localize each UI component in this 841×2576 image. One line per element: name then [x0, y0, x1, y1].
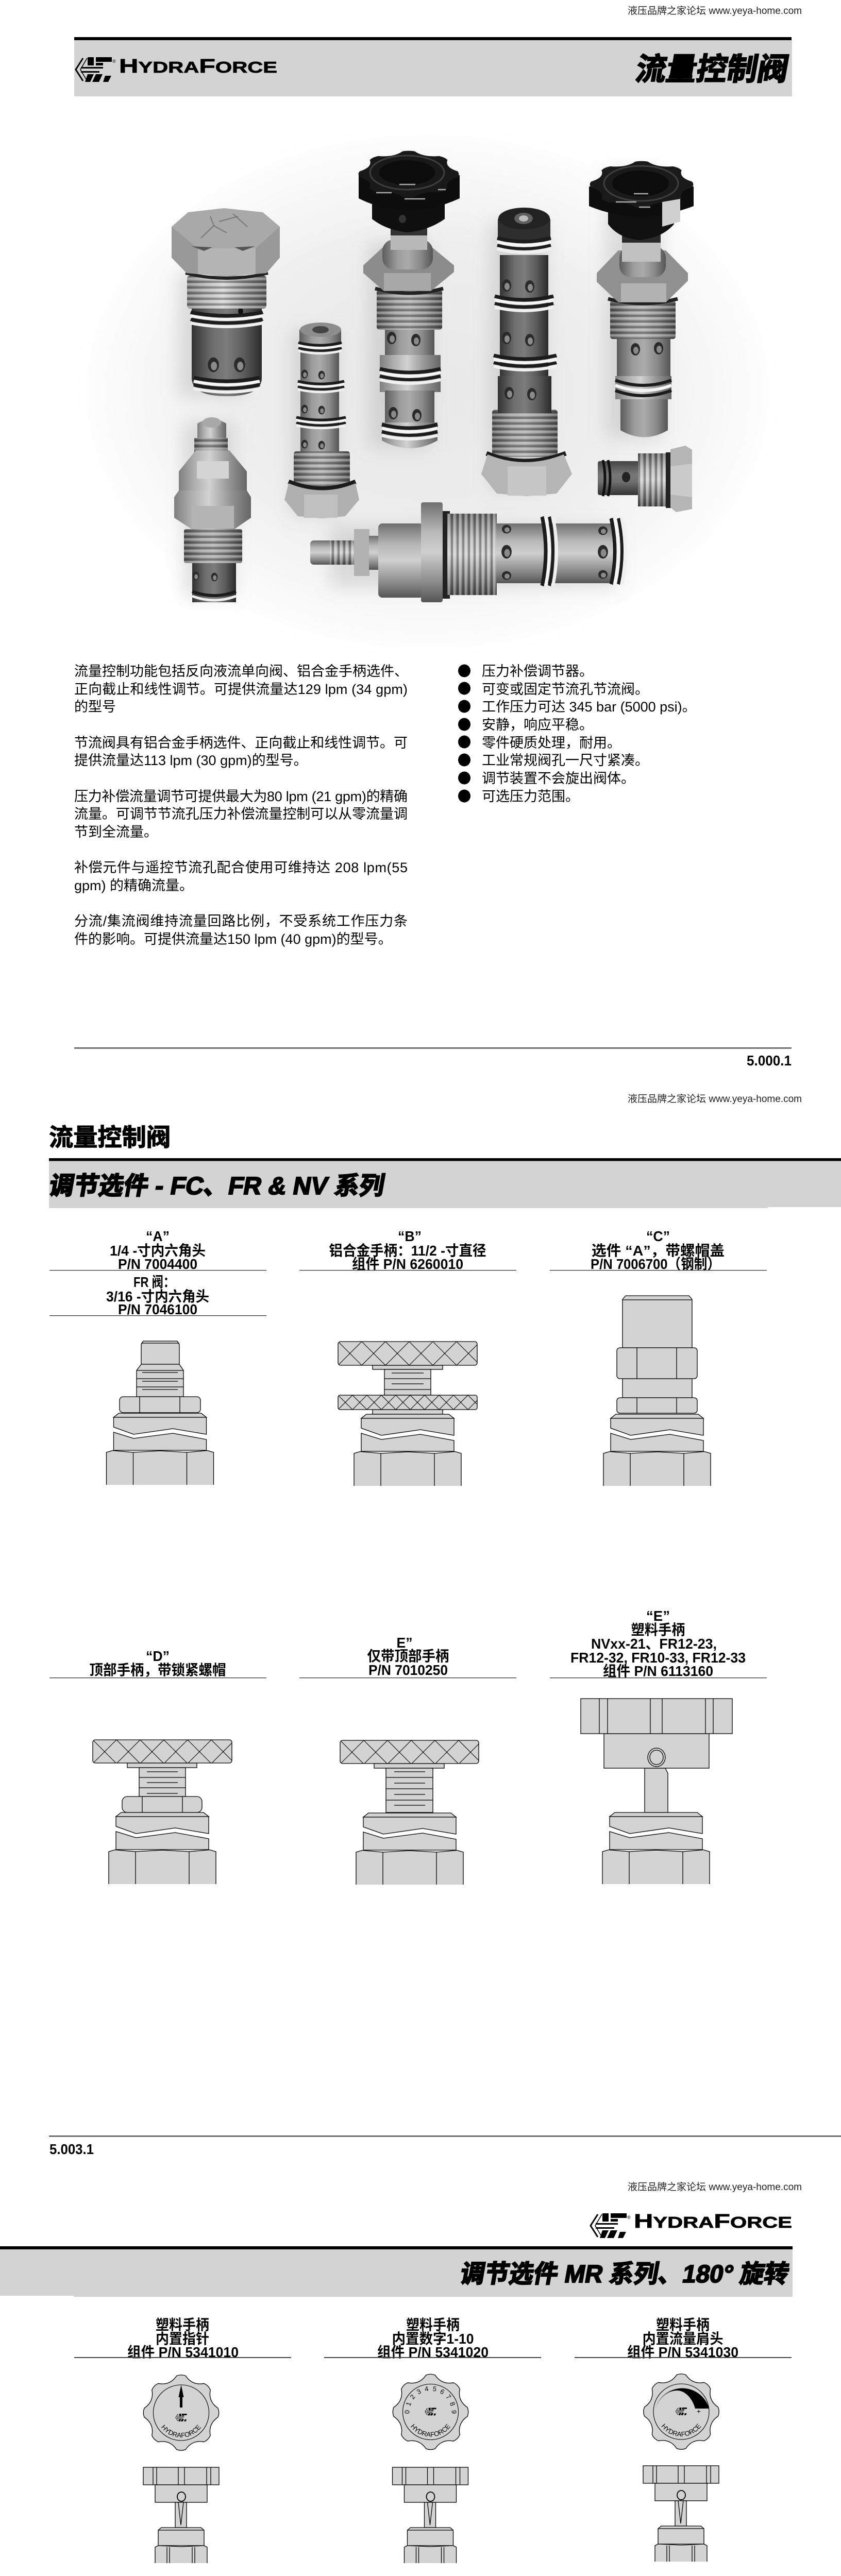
option 5341010: plastic handle with pointer: 塑料手柄 — [156, 2317, 209, 2333]
footer: page 2: 5.003.1 — [49, 2141, 94, 2157]
bullet list: features: 可变或固定节流孔节流阀。 — [482, 682, 649, 697]
option 5341010: plastic handle with pointer: 内置指针 — [156, 2331, 209, 2347]
watermark: page 2: 液压品牌之家论坛 www.yeya-home.com — [628, 1093, 802, 1105]
heading: adjustment options: 调节选件 - FC、FR & NV 系列 — [47, 1172, 387, 1200]
drawing: top view numbered knob: 0 — [403, 2410, 411, 2414]
valve: small horizontal — [598, 446, 692, 512]
logo: HydraForce page 3 — [591, 2211, 792, 2238]
option C: label and drawing — [550, 1228, 767, 1486]
drawing: top view pointer knob: HYDRAFORCE — [161, 2425, 201, 2438]
option A: label and drawing — [49, 1228, 266, 1485]
option D: label and drawing: “D” — [146, 1648, 170, 1664]
option 5341010: plastic handle with pointer: 组件 P/N 5341010 — [127, 2344, 239, 2360]
heading: MR adjustment options: 调节选件 MR 系列、180° 旋转 — [458, 2260, 792, 2288]
bullet list: features: 可选压力范围。 — [482, 789, 579, 804]
option A: label and drawing: 3/16 -寸内六角头 — [106, 1289, 209, 1304]
text block: product description: 件的影响。可提供流量达150 lpm (40 gpm)的型号。 — [74, 931, 392, 947]
option E plastic: label and drawing — [550, 1608, 767, 1884]
drawing: side view — [393, 2467, 468, 2563]
text block: product description: 补偿元件与遥控节流孔配合使用可维持达 208 lpm(55 — [74, 860, 408, 875]
option 5341030: plastic handle with flow wedge: 组件 P/N 5341030 — [627, 2344, 738, 2360]
bullet list: features — [458, 664, 696, 804]
option E: label and drawing: P/N 7010250 — [368, 1662, 448, 1678]
option 5341020: plastic handle with numbers: 组件 P/N 5341020 — [377, 2344, 489, 2360]
text block: product description: 分流/集流阀维持流量回路比例，不受系统工作压力条 — [74, 913, 408, 929]
option D: label and drawing: 顶部手柄，带锁紧螺帽 — [90, 1662, 226, 1678]
drawing: top view numbered knob: 5 — [432, 2385, 437, 2393]
option 5341030: plastic handle with flow wedge — [575, 2317, 792, 2562]
option 5341020: plastic handle with numbers: 塑料手柄 — [406, 2317, 460, 2333]
logo: HydraForce — [76, 56, 277, 82]
drawing: top view numbered knob: HYDRAFORCE — [411, 2424, 450, 2437]
drawing: top view numbered knob: 1 — [404, 2401, 413, 2407]
text block: product description: 正向截止和线性调节。可提供流量达129 lpm (34 gpm) — [74, 682, 408, 697]
option 5341020: plastic handle with numbers: 内置数字1-10 — [392, 2331, 474, 2347]
option C: label and drawing: P/N 7006700（钢制） — [591, 1256, 720, 1272]
drawing: top handle with locknut — [93, 1740, 232, 1884]
option A: label and drawing: “A” — [146, 1228, 170, 1244]
option 5341030: plastic handle with flow wedge: 塑料手柄 — [656, 2317, 710, 2333]
text block: product description: 的型号 — [74, 699, 116, 715]
watermark: page 3: 液压品牌之家论坛 www.yeya-home.com — [628, 2181, 802, 2193]
drawing: aluminium handle — [338, 1342, 477, 1486]
option C: label and drawing: “C” — [646, 1228, 670, 1244]
option E: label and drawing: 仅带顶部手柄 — [367, 1648, 449, 1664]
valve: small cartridge — [284, 323, 359, 518]
drawing: top view wedge knob — [643, 2374, 719, 2450]
option B: label and drawing: “B” — [398, 1228, 422, 1244]
text block: product description: gpm) 的精确流量。 — [74, 878, 193, 893]
option C: label and drawing: 选件 “A”，带螺帽盖 — [592, 1243, 725, 1259]
option A: label and drawing: 1/4 -寸内六角头 — [110, 1243, 206, 1259]
text block: product description: 节流阀具有铝合金手柄选件、正向截止和线性调节。可 — [74, 735, 408, 751]
logo: HydraForce page 3: ® — [627, 2215, 631, 2220]
valve: lower left adjuster — [174, 417, 251, 602]
valve: knob adjuster right — [589, 161, 694, 437]
text block: product description — [74, 664, 408, 947]
soft shadows — [178, 170, 662, 598]
drawing: top view numbered knob — [393, 2374, 469, 2450]
option B: label and drawing: 组件 P/N 6260010 — [352, 1256, 463, 1272]
footer: page 1: 5.000.1 — [747, 1053, 792, 1069]
drawing: top view numbered knob: 9 — [450, 2410, 458, 2414]
logo: HydraForce: ® — [112, 59, 116, 64]
drawing: top view numbered knob: 6 — [439, 2387, 446, 2396]
option E: label and drawing: E” — [397, 1635, 412, 1651]
drawing: top handle only — [340, 1740, 479, 1885]
valve: hex plug — [172, 208, 280, 396]
option E plastic: label and drawing: “E” — [646, 1608, 670, 1624]
product photo: flow control valves — [72, 124, 783, 659]
option B: label and drawing: 铝合金手柄：11/2 -寸直径 — [329, 1243, 486, 1259]
option E plastic: label and drawing: FR12-32, FR10-33, FR12-33 — [570, 1650, 746, 1666]
heading: page title: 流量控制阀 — [633, 52, 792, 87]
option 5341030: plastic handle with flow wedge: 内置流量肩头 — [642, 2331, 724, 2347]
drawing: hex socket adjuster — [106, 1341, 213, 1485]
option D: label and drawing — [49, 1648, 266, 1884]
drawing: top view numbered knob: 7 — [444, 2393, 452, 2401]
heading: section title page 2: 流量控制阀 — [49, 1124, 171, 1151]
logo: HydraForce: H YDRA F ORCE — [119, 56, 277, 77]
drawing: top view wedge knob: HYDRAFORCE — [662, 2424, 701, 2437]
drawing: top view numbered knob: 4 — [424, 2385, 429, 2393]
bullet list: features: 压力补偿调节器。 — [482, 664, 593, 679]
text block: product description: 流量控制功能包括反向液流单向阀、铝合金手柄选件、 — [74, 664, 408, 679]
logo: HydraForce page 3: H YDRA F ORCE — [634, 2211, 792, 2232]
text block: product description: 节到全流量。 — [74, 824, 158, 840]
header banner: MR series options — [0, 2246, 793, 2297]
option E plastic: label and drawing: 塑料手柄 — [631, 1622, 685, 1638]
option A: label and drawing: P/N 7046100 — [118, 1301, 197, 1317]
valve: tall cartridge — [481, 208, 572, 496]
bullet list: features: 调节装置不会旋出阀体。 — [482, 771, 635, 786]
bullet list: features: 工作压力可达 345 bar (5000 psi)。 — [482, 699, 696, 715]
bullet list: features: 安静，响应平稳。 — [482, 717, 593, 733]
watermark: page 1: 液压品牌之家论坛 www.yeya-home.com — [628, 5, 802, 16]
drawing: top view wedge knob: + — [697, 2407, 701, 2415]
drawing: top view pointer knob — [143, 2375, 220, 2451]
drawing: side view — [643, 2466, 719, 2562]
option A: label and drawing: P/N 7004400 — [118, 1256, 197, 1272]
header banner: page 1 — [74, 37, 792, 96]
valve: large horizontal — [310, 502, 626, 602]
option E: label and drawing — [299, 1635, 516, 1885]
drawing: side view — [143, 2467, 219, 2563]
drawing: plastic handle — [581, 1699, 732, 1884]
option 5341010: plastic handle with pointer — [74, 2317, 291, 2563]
option A: label and drawing: FR 阀： — [133, 1274, 175, 1290]
valve: knob adjuster left — [359, 151, 460, 448]
drawing: top view numbered knob: 8 — [448, 2401, 457, 2407]
drawing: top view numbered knob: 2 — [409, 2393, 417, 2401]
drawing: cap with nut — [603, 1296, 711, 1486]
option E plastic: label and drawing: 组件 P/N 6113160 — [603, 1663, 713, 1679]
text block: product description: 压力补偿流量调节可提供最大为80 lpm (21 gpm)的精确 — [74, 789, 408, 804]
text block: product description: 流量。可调节节流孔压力补偿流量控制可以从零流量调 — [74, 806, 408, 822]
option E plastic: label and drawing: NVxx-21、FR12-23, — [591, 1636, 717, 1652]
bullet list: features: 工业常规阀孔一尺寸紧凑。 — [482, 753, 649, 768]
option 5341020: plastic handle with numbers — [324, 2317, 541, 2563]
text block: product description: 提供流量达113 lpm (30 gpm)的型号。 — [74, 753, 308, 768]
bullet list: features: 零件硬质处理，耐用。 — [482, 735, 621, 751]
option B: label and drawing — [299, 1228, 516, 1486]
header banner: FC FR NV options — [47, 1158, 841, 1208]
drawing: top view numbered knob: 3 — [415, 2387, 423, 2396]
